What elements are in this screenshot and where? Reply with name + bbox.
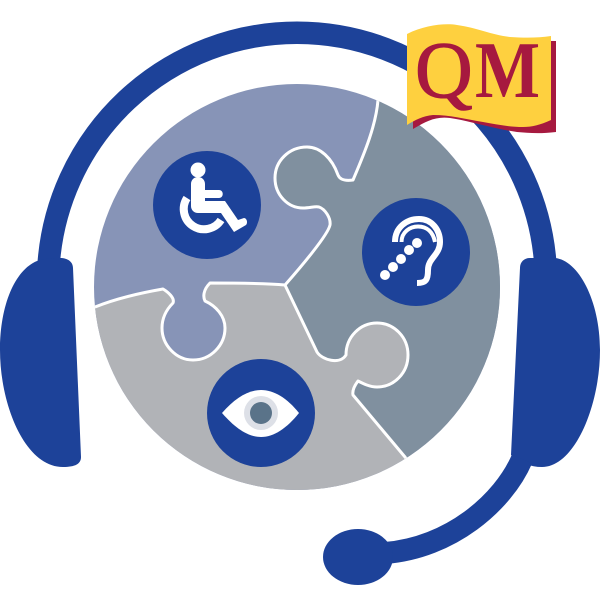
icon: hearing [362,198,470,306]
puzzle piece: top left [94,84,500,490]
icon: eye [207,359,315,467]
QM wordmark: M [475,27,540,115]
puzzle piece: bottom [95,284,406,490]
puzzle circle [94,84,500,490]
flag shadow [413,40,556,133]
flag banner [407,24,551,127]
headband [48,33,546,266]
microphone [323,529,393,585]
right ear cup [511,258,600,467]
microphone boom [385,459,522,553]
puzzle seams [95,100,410,459]
left ear cup [0,258,81,467]
QM wordmark: Q [415,27,473,115]
QM logo flag [407,24,556,133]
icon: wheelchair [153,151,261,259]
puzzle piece: right [276,101,500,458]
